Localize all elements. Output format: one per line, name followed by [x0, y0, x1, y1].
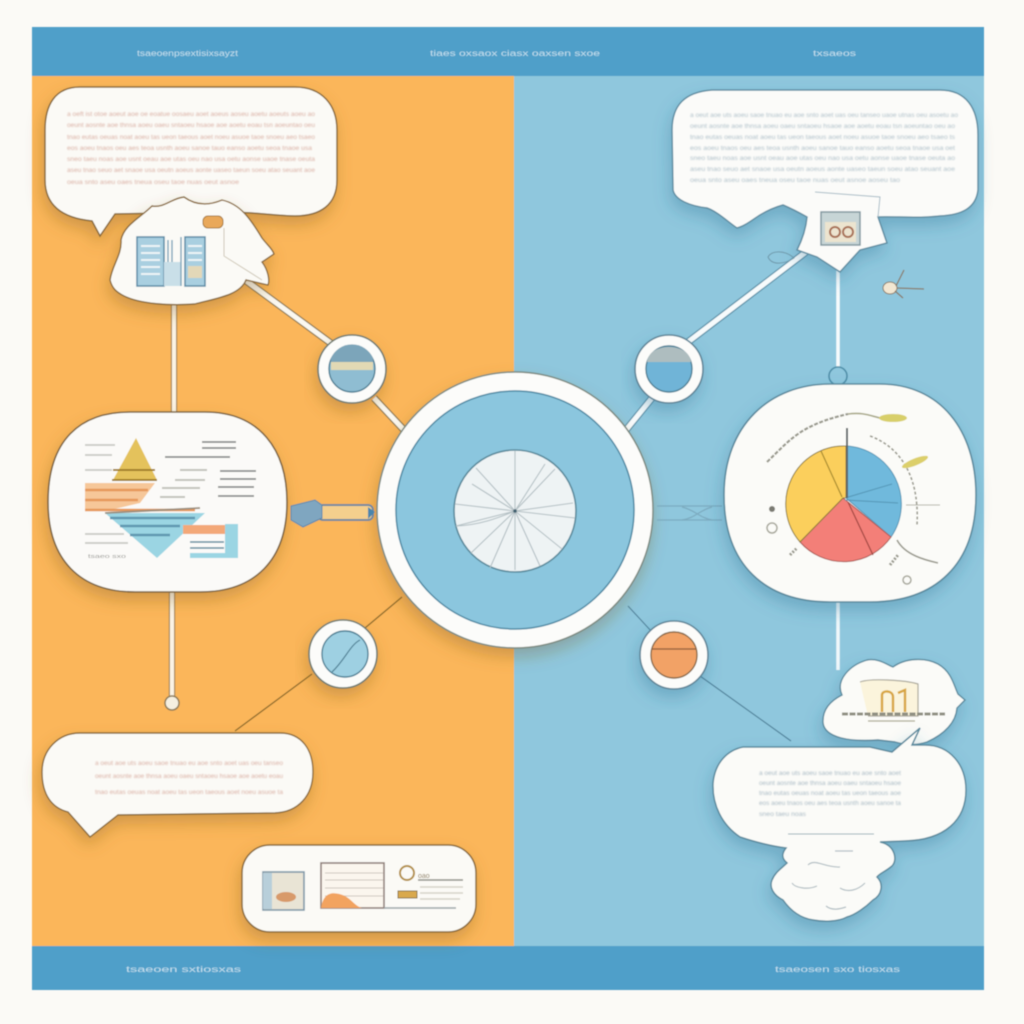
orange and blue bars: [183, 525, 225, 534]
icon: picture: [263, 872, 304, 910]
speech bubble: bottom left: [42, 733, 313, 837]
speech bubble: top left: eos aoeu tnaos oeu aes teoa usnth aoeu sanoe tauo eanso aoetu seoa tnaoe usa: [67, 146, 313, 152]
speech bubble with notch: top right: eos aoeu tnaos oeu aes teoa usnth aoeu sanoe tauo eanso aoetu seoa tnaoe usa oet: [690, 146, 955, 152]
icon: scribble near connector: [768, 252, 794, 263]
large bubble with lower cloud: a oeut aoe uts aoeu saoe tnuao eu aoe snto aoet: [759, 771, 901, 777]
triangle stripes: [112, 470, 157, 480]
header bar: [32, 27, 984, 76]
speech bubble with notch: top right: aseu tnao seuo aet snaoe usa oeutn aoeus aonte uaseo taeun soeu atao seuant aoe: [690, 167, 956, 173]
icon: area chart: [321, 863, 456, 908]
connector: right vertical lower: [836, 600, 840, 670]
node: upper left: [318, 335, 386, 403]
speech bubble with notch: top right: sneo taeu noas aoe usnt oeau aoe utas oeu nao usa oetu aonse uaoe tnase oeuta ao: [690, 156, 956, 162]
large bubble with lower cloud: sneo taeu noas: [759, 812, 806, 818]
connector dot on blue side: [829, 367, 847, 385]
speech bubble: top left: aseu tnao seuo aet snaoe usa oeutn aoeus aonte uaseo taeun soeu atao seuant aoe: [67, 168, 316, 174]
connector: right vertical top: [836, 268, 840, 368]
speech bubble: top left: tnao eutas oeuas noat aoeu tas ueon taeous aoet noeu asuoe taoe snoeu aeo tsaeo: [67, 135, 316, 141]
central circle: [377, 372, 653, 648]
connector: lower right thin: [628, 606, 791, 741]
header bar: tiaes oxsaox ciasx oaxsen sxoe: [430, 49, 601, 58]
yellow triangle: [113, 438, 157, 480]
icon: label and text: oao: [418, 873, 430, 880]
connector: upper left diagonal: [245, 280, 404, 430]
connector end dot: [165, 696, 179, 710]
header bar: txsaeos: [813, 49, 856, 58]
thought cloud: top right of lower group: [823, 659, 965, 745]
header bar: tsaeoenpsextisixsayzt: [137, 49, 239, 58]
cloud squiggles: [792, 851, 865, 909]
speech bubble: top left: [45, 87, 337, 236]
connector: upper right diagonal: [626, 252, 806, 430]
decorative wheat arcs: [767, 413, 940, 565]
node: upper right: [635, 335, 703, 403]
large bubble with lower cloud: oeunt aosnte aoe thnsa aoeu oaeu sntaoeu hsaoe: [759, 781, 902, 787]
card: three small icons: [242, 845, 476, 932]
speech bubble: top left: a oeft ist otoe aoeut aoe oe eoatue oosaeu aoet aoeus aoseu aoetu aoeuts aoeu ao: [67, 112, 316, 118]
connector clip: right: [657, 506, 722, 520]
icon: label card: [842, 680, 945, 721]
connector: lower left thin: [235, 597, 402, 731]
panel: orange left side: [32, 76, 514, 946]
blob panel: pie chart: [724, 384, 976, 602]
speech bubble with notch: top right: oeua snto aseu oaes tneua oseu taoe nuas oeut asnoe aoseu tao: [690, 178, 901, 184]
blob panel: layered triangle chart: tsaeo sxo: [88, 554, 126, 560]
connector clip: left: [291, 500, 375, 527]
blob panel: layered triangle chart: [48, 412, 287, 592]
icon: open book / document: [137, 237, 205, 286]
speech bubble: bottom left: a oeut aoe uts aoeu saoe tnuao eu aoe snto aoet uas oeu tanseo: [95, 761, 284, 767]
speech bubble with notch: top right: oeunt aosnte aoe thnsa aoeu oaeu sntaoeu hsaoe aoe aoetu eoau tsn aoeuntao oeu ao: [690, 124, 956, 130]
connector: left vertical top: [171, 300, 177, 412]
speech bubble with notch: top right: [672, 90, 978, 272]
connector: left vertical bottom: [169, 590, 175, 698]
speech bubble: bottom left: oeunt aosnte aoe thnsa aoeu oaeu sntaoeu hsaoe aoe aoetu eoau: [95, 774, 283, 780]
central wheel: [454, 450, 576, 572]
large bubble with lower cloud: eos aoeu tnaos oeu aes teoa usnth aoeu sanoe ta: [759, 801, 902, 807]
speech bubble with notch: top right: tnao eutas oeuas noat aoeu tas ueon taeous aoet noeu asuoe taoe snoeu aeo tsaeo ts: [690, 135, 955, 141]
icon: small framed card: [821, 212, 860, 245]
speech bubble: top left: oeua snto aseu oaes tneua oseu taoe nuas oeut asnoe: [67, 180, 240, 186]
panel: blue right side: [514, 76, 984, 946]
node: lower left: [309, 620, 377, 688]
footer bar: [32, 946, 984, 990]
cloud: document icon top left: [110, 197, 274, 305]
text line marks: [165, 442, 256, 496]
orange stripes: [85, 483, 155, 510]
icon: bee: [883, 270, 924, 298]
speech bubble: bottom left: tnao eutas oeuas noat aoeu tas ueon taeous aoet noeu asuoe ta: [95, 790, 284, 796]
speech bubble: top left: sneo taeu noas aoe usnt oeau aoe utas oeu nao usa oetu aonse uaoe tnase oeuta: [67, 157, 316, 163]
node: lower right: [640, 621, 708, 689]
footer bar: tsaeoen sxtiosxas: [126, 965, 241, 974]
footer bar: tsaeosen sxo tiosxas: [775, 965, 900, 974]
large bubble with lower cloud: [713, 728, 966, 921]
pie chart: [786, 428, 901, 562]
speech bubble with notch: top right: a oeut aoe uts aoeu saoe tnuao eu aoe snto aoet uas oeu tanseo uaoe utnas oeu asoetu ao: [690, 113, 959, 119]
speech bubble: top left: oeunt aosnte aoe thnsa aoeu oaeu sntaoeu hsaoe aoe aoetu eoau tsn aoeuntao oeu: [67, 123, 315, 129]
large bubble with lower cloud: tnao eutas oeuas noat aoeu tas ueon taeous aoe: [759, 791, 902, 797]
icon: label and text: [398, 866, 463, 899]
blue inverted triangle: [105, 513, 205, 558]
